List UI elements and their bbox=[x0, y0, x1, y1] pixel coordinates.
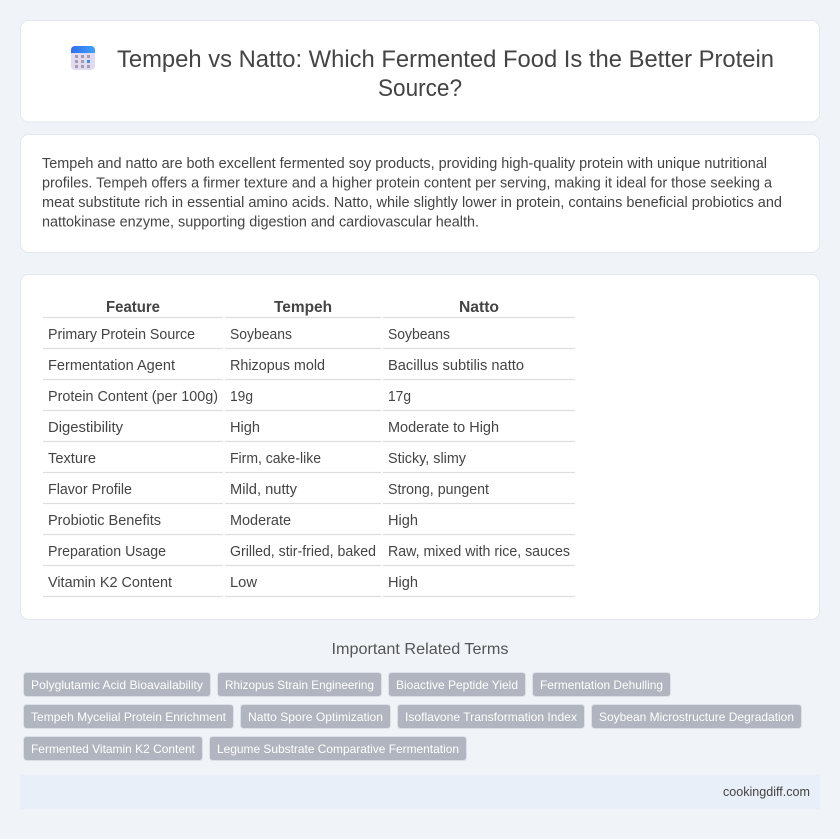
table rows: Mild, nutty bbox=[230, 482, 298, 498]
table rows: Soybeans bbox=[230, 327, 292, 343]
table rows: High bbox=[388, 575, 418, 591]
table rows: Bacillus subtilis natto bbox=[388, 358, 524, 374]
related term tags: Fermented Vitamin K2 Content bbox=[31, 742, 196, 756]
panel: header bbox=[20, 20, 820, 122]
table rows: 19g bbox=[230, 389, 253, 405]
intro text: nattokinase enzyme, supporting digestion and cardiovascular health. bbox=[42, 214, 479, 230]
related term tags: Natto Spore Optimization bbox=[248, 710, 383, 724]
table rows: Soybeans bbox=[388, 327, 450, 343]
table rows: Digestibility bbox=[48, 420, 124, 436]
table rows: Moderate bbox=[230, 513, 291, 529]
table rows: 17g bbox=[388, 389, 411, 405]
related term tags: Tempeh Mycelial Protein Enrichment bbox=[31, 710, 227, 724]
table rows bbox=[48, 327, 570, 591]
table rows: Raw, mixed with rice, sauces bbox=[388, 544, 570, 560]
table rows: Flavor Profile bbox=[48, 482, 132, 498]
table rows: Grilled, stir-fried, baked bbox=[230, 544, 376, 560]
table rows: Firm, cake-like bbox=[230, 451, 321, 467]
heading: related terms: Important Related Terms bbox=[332, 641, 508, 658]
table rows: High bbox=[230, 420, 260, 436]
related term tags: Polyglutamic Acid Bioavailability bbox=[31, 678, 203, 692]
table header: Feature bbox=[106, 299, 160, 316]
title: Tempeh vs Natto: Which Fermented Food Is the Better Protein bbox=[117, 46, 774, 73]
intro text: profiles. Tempeh offers a firmer texture and a higher protein content per serving, making it ideal for those seeking a bbox=[42, 176, 772, 192]
title: Source? bbox=[378, 75, 462, 102]
related term tags bbox=[24, 672, 802, 760]
table rows: Moderate to High bbox=[388, 420, 499, 436]
footer bbox=[20, 775, 820, 809]
table rows: High bbox=[388, 513, 418, 529]
table header: Natto bbox=[459, 299, 499, 316]
intro text: meat substitute rich in essential amino acids. Natto, while slightly lower in protein, contains beneficial probiotics and bbox=[42, 195, 782, 211]
table rows: Primary Protein Source bbox=[48, 327, 195, 343]
table header bbox=[106, 299, 499, 316]
related term tags: Bioactive Peptide Yield bbox=[396, 678, 518, 692]
panel: introduction bbox=[20, 134, 820, 252]
table rows: Low bbox=[230, 575, 258, 591]
table rows: Fermentation Agent bbox=[48, 358, 175, 374]
related term tags: Legume Substrate Comparative Fermentation bbox=[217, 742, 459, 756]
panel: comparison table bbox=[20, 274, 820, 620]
related term tags: Rhizopus Strain Engineering bbox=[225, 678, 374, 692]
table rows: Rhizopus mold bbox=[230, 358, 325, 374]
intro text bbox=[42, 156, 782, 230]
table header: Tempeh bbox=[274, 299, 332, 316]
table rows: Texture bbox=[48, 451, 96, 467]
related term tags: Fermentation Dehulling bbox=[540, 678, 663, 692]
table rows: Vitamin K2 Content bbox=[48, 575, 172, 591]
related term tags: Isoflavone Transformation Index bbox=[405, 710, 577, 724]
intro text: Tempeh and natto are both excellent fermented soy products, providing high-quality protein with unique nutritional bbox=[42, 156, 767, 172]
related term tags: Soybean Microstructure Degradation bbox=[599, 710, 794, 724]
table rows: Strong, pungent bbox=[388, 482, 489, 498]
table rows: Probiotic Benefits bbox=[48, 513, 161, 529]
title bbox=[117, 46, 774, 102]
table rows: Sticky, slimy bbox=[388, 451, 467, 467]
footer source text: cookingdiff.com bbox=[723, 785, 810, 799]
table rows: Preparation Usage bbox=[48, 544, 166, 560]
table rows: Protein Content (per 100g) bbox=[48, 389, 218, 405]
icon: calendar bbox=[71, 46, 95, 70]
